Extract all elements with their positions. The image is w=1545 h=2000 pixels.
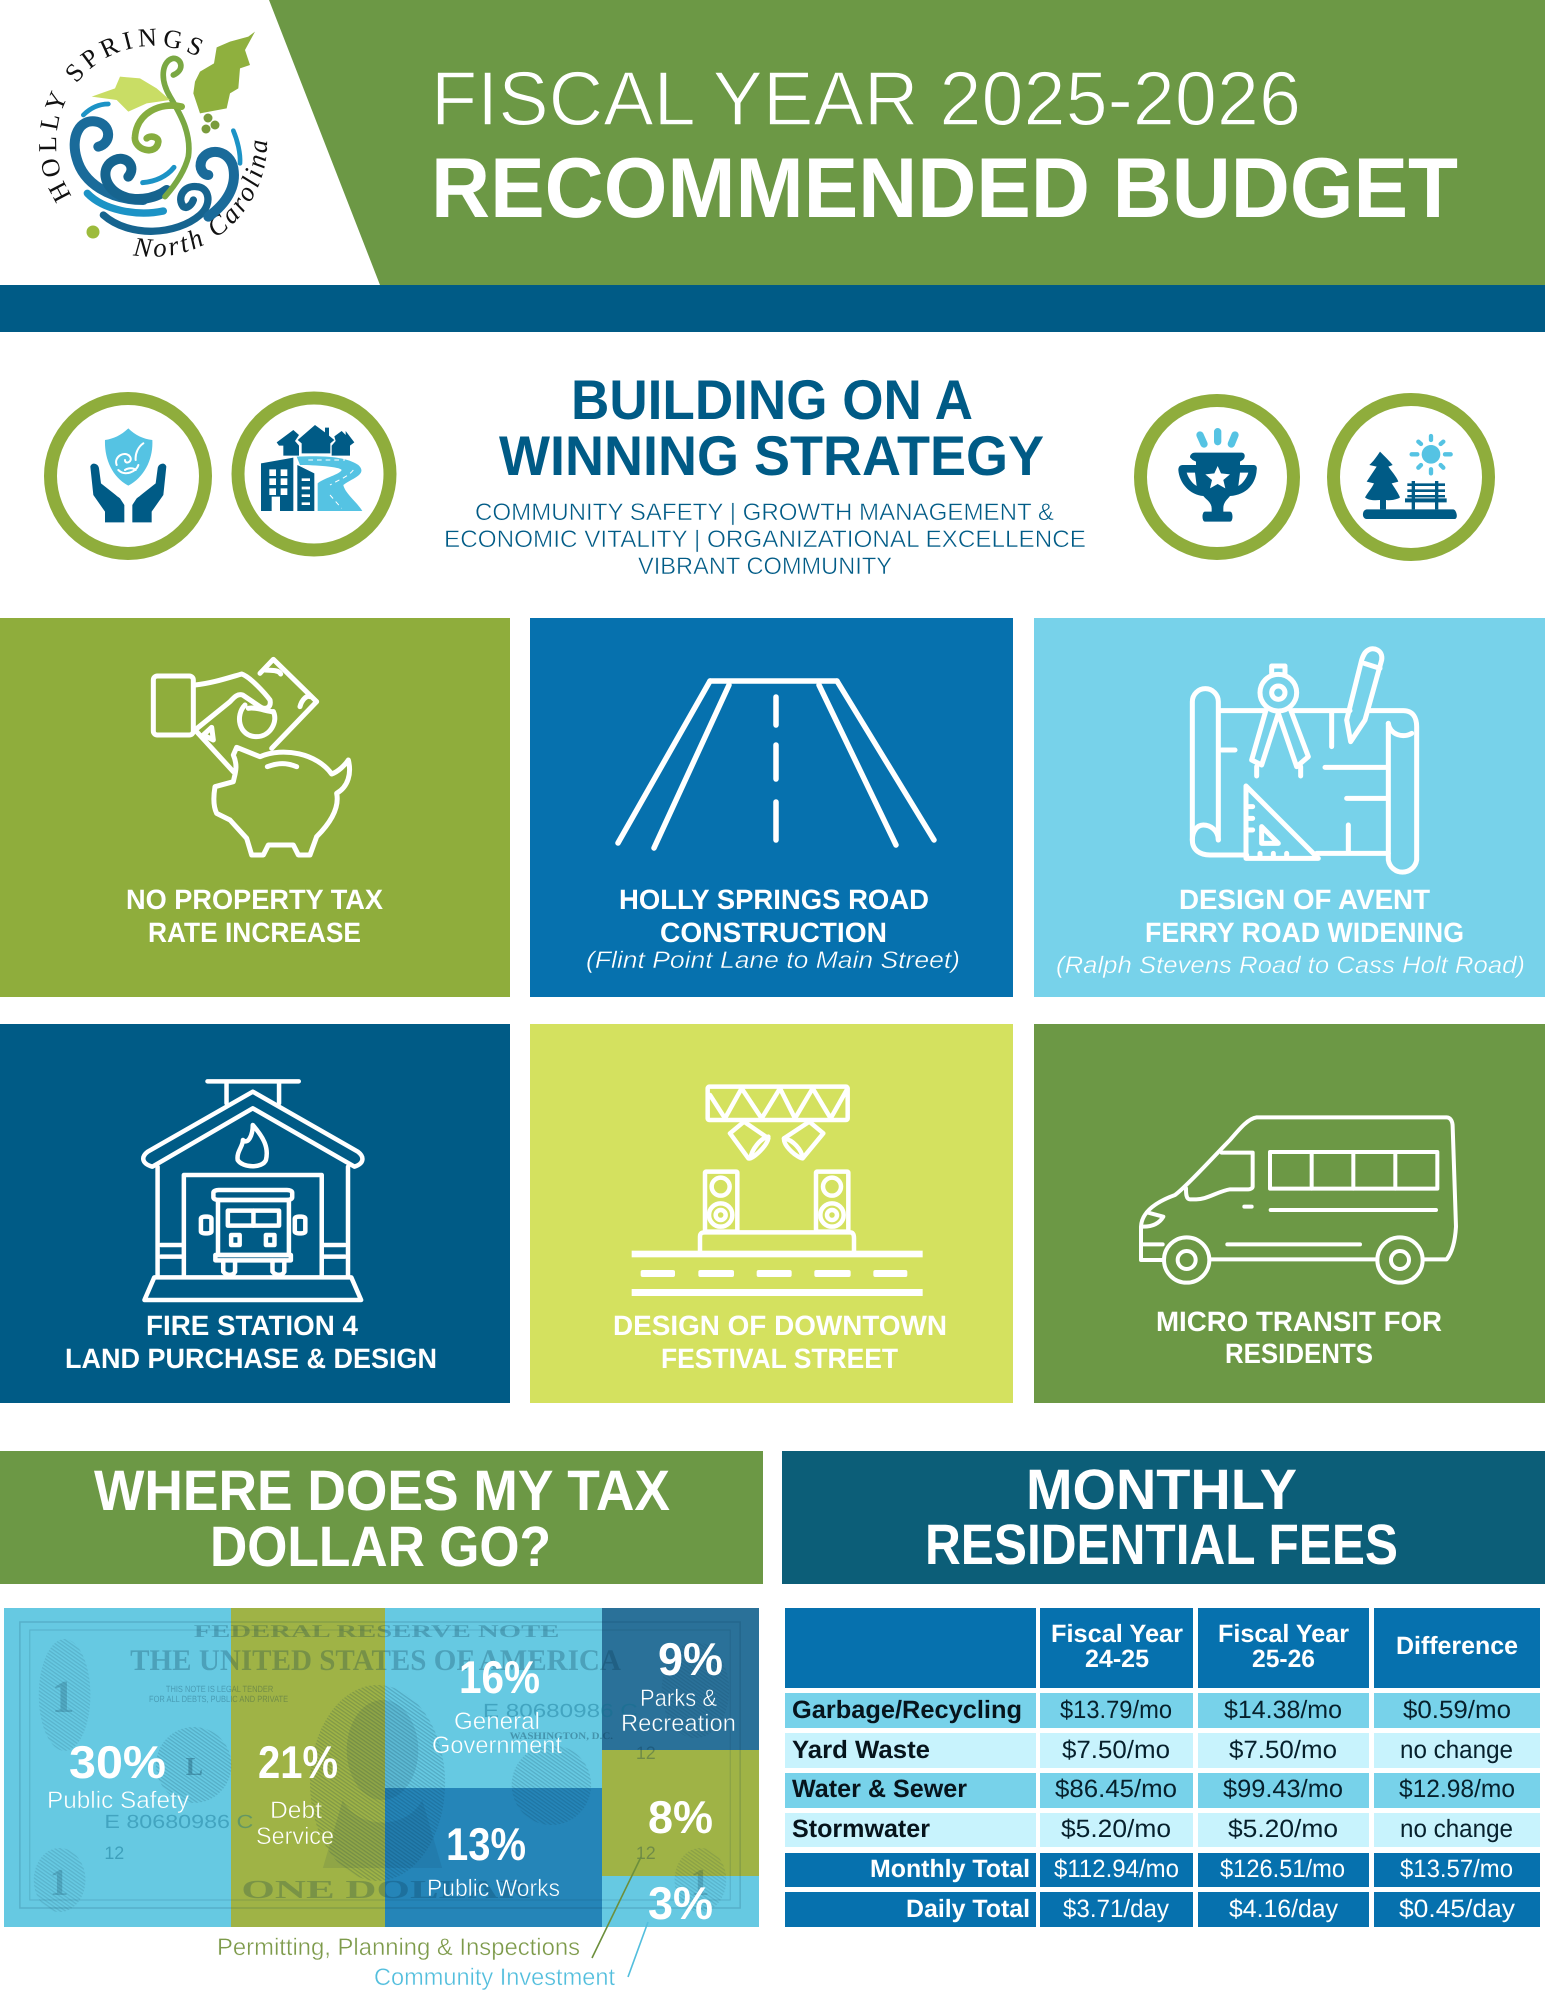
row: stormwater — [785, 1813, 1540, 1847]
table header row: Difference — [1396, 1632, 1518, 1660]
strategy icon: organizational excellence — [1140, 400, 1294, 554]
dollar bill artwork: THE UNITED STATES OF AMERICA — [130, 1644, 621, 1677]
row: yard waste: no change — [1400, 1736, 1513, 1764]
panel text — [1156, 1306, 1442, 1369]
icon: road — [618, 681, 934, 848]
row: yard waste: $7.50/mo — [1062, 1736, 1170, 1764]
panel text: FESTIVAL STREET — [661, 1343, 898, 1374]
panel text: NO PROPERTY TAX — [126, 884, 383, 915]
row: monthly total: $112.94/mo — [1054, 1855, 1179, 1883]
dollar bill artwork: THIS NOTE IS LEGAL TENDER — [166, 1684, 274, 1694]
dollar bill artwork: FEDERAL RESERVE NOTE — [194, 1621, 559, 1641]
dollar bill artwork: 12 — [636, 1843, 656, 1863]
dollar bill artwork: 1 — [50, 1862, 69, 1904]
panel text — [613, 1310, 947, 1374]
row: water and sewer: $86.45/mo — [1055, 1775, 1177, 1803]
treemap blocks — [4, 1608, 759, 1927]
logo: Holly Springs North Carolina: North Carolina — [132, 140, 268, 257]
panel text: DESIGN OF AVENT — [1179, 884, 1430, 915]
panel text: CONSTRUCTION — [660, 917, 887, 948]
header banner — [0, 0, 1545, 332]
label: 9% parks and recreation: Parks & — [640, 1685, 717, 1712]
row: garbage/recycling: Garbage/Recycling — [792, 1696, 1022, 1724]
row: yard waste: $7.50/mo — [1229, 1736, 1337, 1764]
heading: where does my tax dollar go — [0, 1451, 763, 1584]
heading: monthly residential fees: RESIDENTIAL FEES — [925, 1513, 1398, 1577]
title line 2: RECOMMENDED BUDGET — [431, 141, 1458, 236]
panel text: RATE INCREASE — [148, 917, 361, 948]
label: 21% debt service: Debt — [270, 1797, 322, 1824]
strategy icon: growth management — [238, 398, 390, 550]
label: 16% general government: 16% — [459, 1651, 540, 1703]
panel text: MICRO TRANSIT FOR — [1156, 1306, 1442, 1337]
dollar bill artwork: E 80680986 C — [104, 1812, 253, 1833]
label: 21% debt service — [256, 1736, 338, 1850]
panel: holly springs road construction — [530, 618, 1013, 997]
heading: where does my tax dollar go: DOLLAR GO? — [210, 1515, 551, 1579]
panel subtitle: (Ralph Stevens Road to Cass Holt Road) — [1056, 952, 1525, 979]
strategy priorities text: VIBRANT COMMUNITY — [638, 553, 892, 580]
dollar bill artwork: E 80680986 C — [483, 1701, 638, 1722]
row: stormwater: Stormwater — [792, 1815, 930, 1843]
dollar bill artwork — [20, 1621, 740, 1912]
table header row: Fiscal Year — [1218, 1620, 1349, 1648]
panel text: RESIDENTS — [1225, 1338, 1373, 1369]
dollar bill artwork: 1 — [690, 1862, 709, 1904]
heading: building on a winning strategy: BUILDING ON A — [571, 368, 973, 431]
dollar bill artwork: ONE DOLLAR — [241, 1875, 530, 1904]
table: monthly residential fees — [785, 1608, 1540, 1927]
label: 13% public works: Public Works — [427, 1875, 560, 1902]
row: garbage/recycling: $0.59/mo — [1403, 1696, 1511, 1724]
panel text: HOLLY SPRINGS ROAD — [619, 884, 929, 915]
chart: tax dollar treemap over dollar bill — [4, 1608, 759, 1991]
panel: no property tax rate increase — [0, 618, 510, 997]
row: garbage/recycling: $13.79/mo — [1060, 1696, 1172, 1724]
panel: design of avent ferry road widening — [1034, 618, 1545, 997]
logo: Holly Springs North Carolina — [39, 28, 268, 257]
row: daily total: $3.71/day — [1063, 1895, 1169, 1923]
dollar bill artwork: 12 — [104, 1843, 124, 1863]
panel: micro transit for residents — [1034, 1024, 1545, 1403]
label: 16% general government — [432, 1651, 562, 1759]
logo: Holly Springs North Carolina: HOLLY SPRINGS — [39, 28, 203, 204]
label: 9% parks and recreation: Recreation — [621, 1710, 736, 1737]
icon: van — [1141, 1117, 1456, 1283]
label: 9% parks and recreation: 9% — [658, 1633, 723, 1685]
row: monthly total: Monthly Total — [870, 1855, 1030, 1883]
icon: fire station — [143, 1081, 362, 1300]
strategy priorities text: COMMUNITY SAFETY | GROWTH MANAGEMENT & — [475, 499, 1054, 526]
label: 21% debt service: Service — [256, 1823, 334, 1850]
dollar bill artwork: WASHINGTON, D.C. — [510, 1731, 614, 1742]
row: monthly total — [785, 1853, 1540, 1887]
panel text — [126, 884, 383, 948]
strategy priorities text: ECONOMIC VITALITY | ORGANIZATIONAL EXCELLENCE — [444, 526, 1086, 553]
label: 13% public works — [427, 1818, 560, 1902]
row: yard waste — [785, 1733, 1540, 1768]
row: yard waste: Yard Waste — [792, 1736, 930, 1764]
heading: monthly residential fees — [782, 1451, 1545, 1584]
heading: building on a winning strategy: WINNING STRATEGY — [499, 424, 1044, 487]
panel text — [1145, 884, 1464, 948]
table header row — [785, 1608, 1540, 1688]
panel text: FIRE STATION 4 — [146, 1310, 358, 1341]
icon: hand, money and piggy bank — [153, 659, 350, 855]
panel text — [619, 884, 929, 948]
heading: where does my tax dollar go: WHERE DOES MY TAX — [94, 1459, 670, 1523]
panel text — [65, 1310, 437, 1374]
strategy icon: community safety — [50, 398, 206, 554]
label: 30% public safety: 30% — [69, 1736, 166, 1788]
row: stormwater: $5.20/mo — [1228, 1815, 1338, 1843]
row: garbage/recycling — [785, 1693, 1540, 1728]
panel: design of downtown festival street — [530, 1024, 1013, 1403]
row: monthly total: $126.51/mo — [1220, 1855, 1345, 1883]
panel text: LAND PURCHASE & DESIGN — [65, 1343, 437, 1374]
row: daily total: Daily Total — [906, 1895, 1030, 1923]
leader and label: permitting — [217, 1857, 641, 1961]
icon: blueprint, compass, pencil, set square — [1192, 649, 1417, 872]
row: stormwater: $5.20/mo — [1061, 1815, 1171, 1843]
title line 1: FISCAL YEAR 2025-2026 — [431, 56, 1301, 142]
leader and label: community investment — [374, 1922, 648, 1991]
dollar bill artwork: 1 — [52, 1671, 75, 1722]
row: water and sewer: Water & Sewer — [792, 1775, 967, 1803]
label: 30% public safety: Public Safety — [47, 1787, 189, 1814]
label: 30% public safety — [47, 1736, 189, 1814]
label: 21% debt service: 21% — [258, 1736, 338, 1788]
heading: monthly residential fees: MONTHLY — [1026, 1458, 1297, 1522]
leader and label: permitting: Permitting, Planning & Inspections — [217, 1934, 580, 1961]
row: stormwater: no change — [1400, 1815, 1513, 1843]
panel text: FERRY ROAD WIDENING — [1145, 917, 1464, 948]
label: 16% general government: Government — [432, 1732, 562, 1759]
row: daily total — [785, 1892, 1540, 1927]
label: 13% public works: 13% — [446, 1818, 526, 1870]
table header row: 25-26 — [1252, 1645, 1315, 1673]
panel subtitle: (Flint Point Lane to Main Street) — [586, 947, 960, 974]
dollar bill artwork: L — [186, 1752, 203, 1781]
row: monthly total: $13.57/mo — [1400, 1855, 1513, 1883]
strategy icon: vibrant community — [1334, 400, 1488, 554]
dollar bill artwork: 12 — [636, 1743, 656, 1763]
icon: festival stage and street — [632, 1087, 923, 1296]
row: daily total: $4.16/day — [1229, 1895, 1338, 1923]
leader and label: community investment: Community Investment — [374, 1964, 615, 1991]
label: 3% value: 3% — [648, 1877, 713, 1929]
row: water and sewer: $12.98/mo — [1399, 1775, 1515, 1803]
label: 8% value: 8% — [648, 1791, 713, 1843]
row: garbage/recycling: $14.38/mo — [1224, 1696, 1342, 1724]
heading: building on a winning strategy — [499, 368, 1044, 487]
label: 9% parks and recreation — [621, 1633, 736, 1737]
panel: fire station 4 — [0, 1024, 510, 1403]
row: daily total: $0.45/day — [1399, 1895, 1516, 1923]
dollar bill artwork: FOR ALL DEBTS, PUBLIC AND PRIVATE — [149, 1694, 288, 1704]
row: water and sewer — [785, 1773, 1540, 1808]
label: 16% general government: General — [454, 1708, 540, 1735]
table header row: 24-25 — [1085, 1645, 1149, 1673]
table header row: Fiscal Year — [1051, 1620, 1183, 1648]
strategy priorities text — [444, 499, 1086, 580]
panel text: DESIGN OF DOWNTOWN — [613, 1310, 947, 1341]
row: water and sewer: $99.43/mo — [1223, 1775, 1343, 1803]
